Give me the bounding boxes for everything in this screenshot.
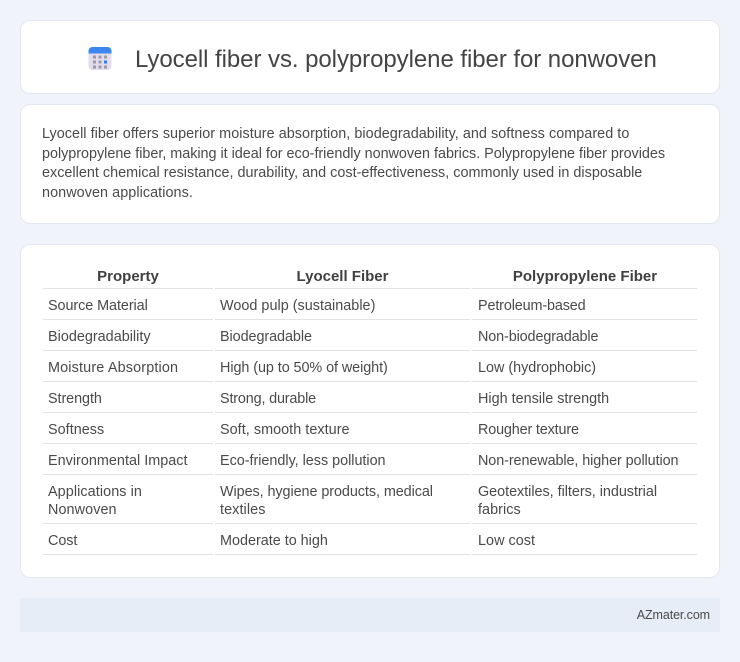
title: Lyocell fiber vs. polypropylene fiber for nonwoven (135, 46, 657, 73)
row: applications in nonwoven: fabrics (478, 502, 521, 518)
row: softness: Rougher texture (478, 422, 579, 438)
intro text: excellent chemical resistance, durability, and cost-effectiveness, commonly used in disposable (42, 165, 642, 181)
row: cost: Moderate to high (220, 533, 328, 549)
row: biodegradability: Biodegradability (48, 329, 151, 345)
row: environmental impact: Eco-friendly, less pollution (220, 453, 386, 469)
row: biodegradability: Biodegradable (220, 329, 312, 345)
row: applications in nonwoven: Applications in (48, 484, 142, 500)
row: moisture absorption: Low (hydrophobic) (478, 360, 596, 376)
row: softness: Softness (48, 422, 104, 438)
row: source material (48, 298, 586, 314)
table header: Property (97, 268, 159, 285)
row: softness: Soft, smooth texture (220, 422, 350, 438)
row: environmental impact: Environmental Impact (48, 453, 187, 469)
row: applications in nonwoven: Nonwoven (48, 502, 117, 518)
row: source material: Wood pulp (sustainable) (220, 298, 375, 314)
row: strength: Strong, durable (220, 391, 316, 407)
intro text: nonwoven applications. (42, 184, 193, 200)
row: environmental impact: Non-renewable, higher pollution (478, 453, 678, 469)
row: source material: Source Material (48, 298, 148, 314)
row: biodegradability: Non-biodegradable (478, 329, 598, 345)
table header (97, 268, 657, 285)
intro text: Lyocell fiber offers superior moisture absorption, biodegradability, and softness compared to (42, 126, 629, 142)
row: applications in nonwoven (48, 484, 657, 518)
panel: comparison table (20, 244, 720, 578)
row: applications in nonwoven: Wipes, hygiene products, medical (220, 484, 433, 500)
row: moisture absorption: Moisture Absorption (48, 360, 178, 376)
row: cost: Low cost (478, 533, 535, 549)
row: moisture absorption: High (up to 50% of weight) (220, 360, 388, 376)
row: strength: Strength (48, 391, 102, 407)
row: biodegradability (48, 329, 598, 345)
table header: Lyocell Fiber (296, 268, 388, 285)
panel: title card (20, 20, 720, 94)
row: cost: Cost (48, 533, 77, 549)
row: strength (48, 391, 609, 407)
row: softness (48, 422, 579, 438)
row: environmental impact (48, 453, 678, 469)
row: source material: Petroleum-based (478, 298, 586, 314)
row: applications in nonwoven: textiles (220, 502, 266, 518)
panel: intro summary (20, 104, 720, 224)
row: cost (48, 533, 535, 549)
footer credit: AZmater.com (637, 608, 710, 622)
row: moisture absorption (48, 360, 596, 376)
table header: Polypropylene Fiber (513, 268, 657, 285)
intro text (42, 126, 665, 200)
row: applications in nonwoven: Geotextiles, filters, industrial (478, 484, 657, 500)
row: strength: High tensile strength (478, 391, 609, 407)
footer bar (20, 598, 720, 632)
icon: calendar (88, 47, 112, 70)
intro text: polypropylene fiber, making it ideal for eco-friendly nonwoven fabrics. Polypropylene fiber provides (42, 146, 665, 162)
